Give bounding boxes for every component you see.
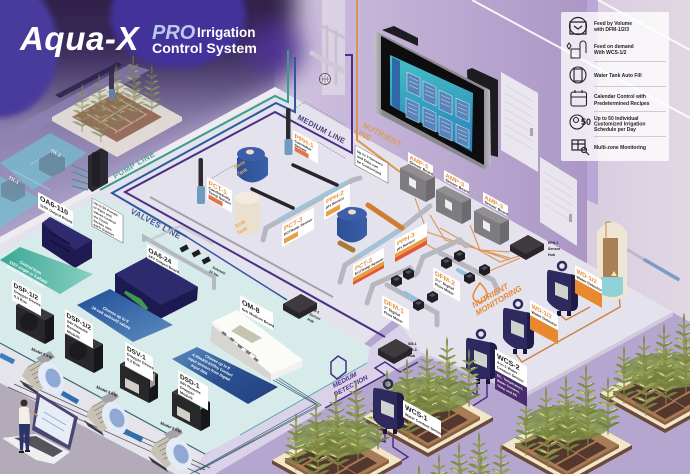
label: WCS-2: 4-in-1 Water bbox=[497, 360, 518, 376]
label: AMP-3 left bbox=[408, 152, 434, 177]
pipes bbox=[144, 178, 678, 325]
wall touch controller tablet bbox=[374, 26, 498, 169]
callout: nutrient line note bbox=[355, 145, 388, 183]
icon: schedule 50: 50 bbox=[581, 117, 591, 127]
label: DSD-1 bbox=[178, 370, 208, 410]
label: DFM-2 bbox=[433, 267, 460, 302]
tank: cream bbox=[234, 192, 260, 235]
text: schedule: Schedule per Day bbox=[594, 127, 636, 133]
hub labels: SM-1 bbox=[408, 342, 417, 346]
hub labels: Sensor bbox=[548, 247, 561, 251]
icon: nutrient drop bbox=[473, 283, 487, 302]
label: PPH-1: PPH-1 bbox=[294, 133, 314, 150]
callout: OM-8 note: 4-20mA/0-5V/Dry Contact bbox=[191, 353, 234, 378]
callout: teal OA6-110 note: 110V single or 3-phase bbox=[8, 259, 49, 285]
label: PCT-1: Temp Sensor bbox=[209, 190, 231, 206]
callout: pump line note: or Fans and bbox=[94, 205, 112, 219]
hub labels: SM-3 bbox=[408, 348, 417, 352]
water tanks zone bbox=[0, 133, 87, 228]
label: DFM-2: DFM-2 bbox=[435, 270, 455, 288]
label: WCS-2 bbox=[495, 349, 527, 407]
callout: nutrient line note: be Customized bbox=[357, 159, 381, 176]
text: tank auto fill: Water Tank Auto Fill bbox=[594, 73, 642, 79]
tanks: Acid bbox=[234, 219, 246, 230]
text: feed on demand: Feed on demand bbox=[594, 44, 634, 50]
probe: PPH-1 bbox=[284, 108, 292, 155]
tray with WCS-1 bbox=[363, 336, 493, 457]
water tanks zone: TK-1 bbox=[7, 175, 20, 186]
callout: pump line note bbox=[92, 198, 123, 243]
label: PPH-2 bbox=[324, 184, 350, 220]
label: DSV-1 bbox=[125, 342, 154, 382]
label: PCT-3 lower bbox=[353, 248, 384, 285]
label: DSD-1: DSD-1 bbox=[180, 373, 200, 391]
callout: pump line note: Valves Control bbox=[93, 210, 116, 225]
tray bottom left bbox=[272, 380, 402, 474]
medium hub upper bbox=[283, 294, 317, 319]
wireless sensors bbox=[466, 262, 578, 384]
label: AMP-3 right: Sensor Board bbox=[484, 200, 509, 217]
label: WCS-2: Water Content, bbox=[497, 378, 520, 394]
nutrient line cable bbox=[357, 0, 400, 172]
label: DFM-1 bbox=[382, 295, 409, 330]
line label: nutrient line: LINE bbox=[352, 126, 373, 143]
solenoid valves bbox=[180, 244, 211, 265]
text: feed on demand: With WCS-1/2 bbox=[594, 50, 627, 56]
tray front center bbox=[502, 364, 632, 474]
medium detection text: MEDIUM bbox=[332, 371, 359, 390]
callout: OA6-24 note: Choose up to 6 bbox=[102, 305, 130, 324]
water tanks zone: TK-2 bbox=[49, 148, 62, 159]
label: OA6-24 bbox=[147, 244, 180, 276]
icon: tank auto fill bbox=[570, 67, 586, 83]
title: PRO bbox=[152, 22, 196, 44]
pump 2: Model 5 KW bbox=[96, 384, 119, 398]
label: DSP-1/2: 0.3 Bus bbox=[14, 294, 27, 305]
label: OA6-110: 110V Output Board bbox=[40, 203, 73, 225]
label: PCT-3 bbox=[282, 207, 314, 247]
callout: OA6-24 note: 24-volt solenoid valves bbox=[91, 305, 132, 331]
label: WD-1/2 upper: Water Detector bbox=[576, 275, 602, 293]
pump line cable bbox=[100, 50, 288, 190]
icon: calendar bbox=[571, 90, 586, 106]
label: PCT-3 lower: EC/Temp Sensor bbox=[355, 257, 384, 276]
icon: feed on demand bbox=[567, 41, 586, 58]
callout: teal OA6-110 note bbox=[0, 247, 93, 294]
medium detection heading with icon bbox=[329, 356, 369, 398]
label: DFM-1: 1" Digital bbox=[384, 305, 400, 318]
sensor probes bbox=[197, 108, 402, 250]
callout: OM-8 note: Choose up to 8 bbox=[204, 354, 230, 370]
text: calendar: Predetermined Recipes bbox=[594, 101, 650, 107]
callout: pump line note: via Touch bbox=[93, 214, 108, 226]
label: WCS-1: Water Content Sensor bbox=[405, 412, 443, 437]
line label: valves line: VALVES LINE bbox=[129, 207, 183, 241]
operator figure bbox=[19, 400, 38, 453]
valves line cable bbox=[112, 57, 295, 237]
callout: teal OA6-110 note: Motors (Pumps, Fans) bbox=[6, 264, 46, 289]
text: calendar: Calendar Control with bbox=[594, 94, 646, 100]
label: PCT-1: PCT-1 bbox=[208, 180, 227, 197]
medium hub lower bbox=[378, 339, 412, 364]
callout: nutrient line note: and Data can bbox=[357, 154, 378, 170]
label: PCT-3: EC/Temp Sensor bbox=[284, 217, 313, 237]
label: WCS-2: Temp and EC bbox=[497, 383, 518, 398]
medium line cable bbox=[125, 55, 385, 337]
callout: pump line note: each channel bbox=[93, 223, 114, 237]
AMP sensor boards bbox=[400, 164, 509, 245]
label: PCT-1: Conductivity bbox=[208, 186, 231, 202]
tray front partial bbox=[418, 432, 511, 474]
callout: OA6-24 note bbox=[77, 289, 173, 342]
faded tray behind title bbox=[52, 55, 182, 157]
callout: OM-8 note: input sensors from Digital bbox=[187, 356, 231, 382]
text: feed by volume: with DFM-1/2/3 bbox=[593, 27, 629, 33]
sensor device: WD-1/2 upper bbox=[547, 262, 578, 316]
label: DSP-1/2 bbox=[12, 279, 41, 316]
tanks bbox=[233, 147, 367, 242]
label: DSD-1: Module bbox=[180, 390, 193, 401]
hub labels: Hub bbox=[408, 354, 416, 358]
label: DSV-1: 0.3 Bus bbox=[127, 357, 140, 368]
label: AMP-3 left: AMP-3 bbox=[410, 154, 429, 171]
pumps bbox=[0, 346, 197, 474]
icon: multi-zone bbox=[572, 140, 589, 155]
label: DSP-1/2 remote bbox=[65, 309, 93, 348]
label: DSV-1: Dropper Device bbox=[127, 352, 154, 371]
pump 3: Model 5 KW bbox=[160, 420, 183, 434]
line label: medium line: MEDIUM LINE bbox=[296, 113, 347, 146]
hub labels: Hub bbox=[548, 253, 556, 257]
hub labels bbox=[307, 241, 561, 358]
label: OA6-24: OA6-24 bbox=[148, 247, 171, 266]
title: Control System bbox=[152, 41, 257, 57]
icon: schedule 50 bbox=[570, 115, 591, 129]
label: PPH-2: pH Sensor bbox=[326, 196, 344, 210]
label: DFM-1: Flow Meter bbox=[384, 310, 403, 325]
label: DFM-1: DFM-1 bbox=[384, 298, 404, 316]
laptop and operator bbox=[2, 392, 78, 464]
label: WCS-1: WCS-1 bbox=[405, 403, 428, 423]
label: DSP-1/2 remote: 24V Remote bbox=[67, 319, 88, 335]
medium detection text: DETECTION bbox=[333, 374, 369, 398]
hub labels: Hub bbox=[307, 317, 315, 324]
flow meters bbox=[391, 250, 490, 311]
label: DSP-1/2 remote: Remote bbox=[67, 324, 81, 336]
label: DSP-1/2 remote: DSP-1/2 bbox=[66, 312, 91, 332]
label: DSP-1/2: DSP-1/2 bbox=[14, 282, 38, 302]
hub labels: SM-1 bbox=[311, 307, 320, 315]
text: solenoid label: 24 Vac bbox=[208, 269, 220, 278]
label: AMP-3 middle: AMP-3 bbox=[446, 172, 465, 189]
device: OM-8 module bbox=[210, 310, 303, 381]
label: DSD-1: 24V Remote bbox=[180, 380, 201, 396]
label: WD-1/2 upper bbox=[575, 265, 602, 308]
driver box: DSV-1 bbox=[120, 359, 158, 403]
label: DSP-1/2 remote: Module bbox=[67, 329, 80, 340]
label: WCS-1 bbox=[403, 400, 443, 439]
line label: pump line: PUMP LINE bbox=[112, 149, 157, 181]
line label: nutrient line: NUTRIENT bbox=[361, 121, 403, 149]
callout: OM-8 note: Input data bbox=[190, 364, 209, 376]
pump controller device bbox=[72, 147, 108, 192]
sensor device: WCS-2 bbox=[466, 330, 497, 384]
label: DFM-2: 1½" Digital bbox=[435, 277, 454, 291]
label: PPH-1: Sensor bbox=[295, 143, 307, 154]
pump 1 bbox=[20, 346, 69, 398]
wall conduit junction and globe icon bbox=[310, 25, 345, 85]
nutrient hub bbox=[510, 235, 544, 260]
sensor device: WD-1/2 lower bbox=[503, 300, 534, 354]
label: DSV-1: DSV-1 bbox=[127, 345, 146, 362]
label: PPH-1 bbox=[293, 130, 318, 164]
tanks: Base bbox=[233, 159, 247, 171]
hub labels: Sensor bbox=[309, 312, 322, 322]
label: PCT-1 bbox=[207, 177, 232, 213]
label: OA6-24: 24V Output Board bbox=[148, 254, 180, 275]
driver box: DSP-1/2 bbox=[16, 300, 54, 344]
callout: teal OA6-110 note: Control from bbox=[19, 259, 43, 276]
pump 2 bbox=[84, 384, 133, 438]
tank: blue lower bbox=[337, 207, 367, 242]
label: AMP-3 middle bbox=[444, 170, 470, 195]
label: DSD-1: Dropper bbox=[180, 385, 194, 397]
label: WCS-2: WCS-2 bbox=[497, 352, 520, 372]
medium strip below teal zone bbox=[175, 325, 425, 474]
label: WCS-2: EC, Temperature, bbox=[497, 373, 523, 391]
device: OA6-110 board bbox=[42, 217, 92, 268]
label: DFM-2: Flow Meter bbox=[435, 282, 454, 297]
text: schedule: Customized Irrigation bbox=[594, 122, 645, 128]
text: schedule: Up to 50 Individual bbox=[594, 116, 639, 122]
label: PCT-3 lower: PCT-3 bbox=[355, 257, 372, 273]
label: WD-1/2 lower: WD-1/2 bbox=[532, 303, 552, 321]
label: PPH-3: pH Sensor bbox=[397, 238, 415, 252]
driver box: DSD-1 bbox=[172, 387, 210, 431]
label: DSP-1/2: Dropper Device bbox=[14, 289, 41, 308]
label: PPH-1: Controller bbox=[294, 139, 312, 152]
nutrient monitoring heading with icon bbox=[470, 277, 523, 318]
label: WD-1/2 upper: WD-1/2 bbox=[576, 268, 597, 286]
text: multi-zone: Multi-zone Monitoring bbox=[594, 145, 646, 151]
title: Aqua-X bbox=[19, 20, 140, 57]
hub labels: EPH-1 bbox=[548, 241, 559, 245]
tanks: Tank bbox=[236, 167, 249, 178]
label: OA6-110 bbox=[38, 192, 73, 227]
label: WCS-2: Content Sensor bbox=[497, 365, 524, 384]
label: PPH-3: PPH-3 bbox=[397, 231, 415, 248]
label: AMP-3 middle: Sensor Board bbox=[446, 178, 470, 195]
labels bbox=[12, 130, 602, 439]
title bbox=[19, 20, 257, 57]
label: PCT-3: PCT-3 bbox=[284, 216, 303, 233]
label: OA6-110: OA6-110 bbox=[40, 194, 68, 217]
label: OM-8 bbox=[240, 295, 275, 331]
callout: pump line note: Screen with bbox=[93, 219, 111, 232]
tank: blue top bbox=[237, 147, 268, 182]
label: OM-8: 8ch Medium Board bbox=[242, 307, 275, 329]
label: PPH-2: PPH-2 bbox=[326, 189, 344, 206]
label: OM-8: OM-8 bbox=[242, 298, 259, 316]
floor platform bbox=[0, 87, 673, 474]
pump drivers bbox=[16, 300, 210, 431]
title: Irrigation bbox=[197, 25, 256, 40]
label: PPH-3 bbox=[395, 222, 427, 262]
text: solenoid label: Solenoid bbox=[212, 265, 226, 276]
label: AMP-3 left: Sensor Board bbox=[410, 160, 434, 177]
label: WD-1/2 lower bbox=[530, 300, 558, 344]
label: AMP-3 right bbox=[483, 192, 509, 217]
nutrient monitoring text: NUTRIENT bbox=[470, 281, 511, 310]
text: feed by volume: Feed by Volume bbox=[594, 21, 632, 27]
callout: nutrient line note: Up to 3 Sensors bbox=[357, 149, 383, 167]
glass reservoir tank bbox=[597, 222, 627, 300]
nutrient monitoring text: MONITORING bbox=[474, 284, 523, 318]
pump 3 bbox=[148, 420, 197, 474]
label: WD-1/2 lower: Water Detector bbox=[532, 310, 557, 328]
panel: feature list bbox=[561, 12, 669, 161]
icon: medium bbox=[331, 356, 346, 379]
driver box: DSP-1/2 remote bbox=[65, 329, 103, 373]
doors bbox=[501, 72, 577, 246]
probe: PCT-1 bbox=[197, 158, 205, 204]
device: OA6-24 board bbox=[115, 257, 198, 319]
callout: OM-8 note bbox=[172, 347, 278, 404]
sensor device: WCS-1 bbox=[373, 380, 404, 434]
tanks: Tank bbox=[236, 226, 249, 237]
tray right bbox=[600, 312, 690, 433]
label: AMP-3 right: AMP-3 bbox=[484, 194, 504, 211]
pump 1: Model 5 KW bbox=[31, 346, 54, 360]
callout: pump line note: Up to 50 Pumps bbox=[94, 201, 118, 218]
teal pump zone floor bbox=[0, 195, 370, 454]
icon: feed by volume bbox=[570, 18, 586, 34]
